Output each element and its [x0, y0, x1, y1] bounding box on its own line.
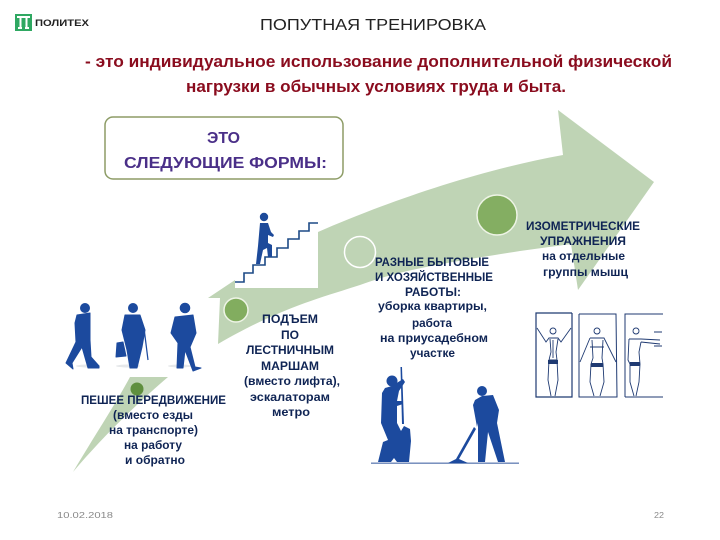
text: walking: на транспорте): [109, 425, 198, 437]
circle: stairs step: [224, 298, 248, 322]
title: ПОПУТНАЯ ТРЕНИРОВКА: [260, 17, 487, 34]
text: stairs: [244, 314, 340, 419]
icon: isometric exercise figures: [536, 313, 663, 397]
text: isometric exercises: УПРАЖНЕНИЯ: [540, 236, 626, 248]
icon: people cleaning: [371, 367, 519, 464]
circle: isometric step: [477, 195, 517, 235]
text: household work: [375, 257, 493, 360]
text: stairs: (вместо лифта),: [244, 376, 340, 388]
text: stairs: эскалаторам: [250, 392, 330, 404]
definition text: - это индивидуальное использование дополнительной физической: [85, 52, 672, 71]
text: household work: на приусадебном: [380, 333, 488, 345]
text: walking: на работу: [124, 440, 183, 452]
text: household work: уборка квартиры,: [378, 301, 487, 313]
growth arrow: [73, 110, 654, 472]
text: walking: (вместо езды: [113, 410, 193, 422]
text: walking: ПЕШЕЕ ПЕРЕДВИЖЕНИЕ: [81, 395, 226, 407]
box: these forms: СЛЕДУЮЩИЕ ФОРМЫ:: [124, 155, 327, 172]
logo: ПОЛИТЕХ: [35, 18, 89, 28]
text: household work: И ХОЗЯЙСТВЕННЫЕ: [375, 271, 493, 284]
date: 10.02.2018: [57, 510, 113, 520]
text: household work: работа: [412, 318, 453, 330]
circle: walking step: [130, 382, 144, 396]
text: household work: РАБОТЫ:: [405, 287, 461, 299]
page number: 22: [654, 510, 664, 520]
text: isometric exercises: [526, 221, 640, 279]
circle: household step: [344, 236, 376, 268]
text: stairs: ПОДЪЕМ: [262, 314, 318, 326]
logo: [15, 14, 89, 31]
box: these forms: [105, 117, 343, 179]
definition text: нагрузки в обычных условиях труда и быта.: [186, 77, 566, 96]
text: stairs: МАРШАМ: [261, 361, 319, 373]
text: isometric exercises: на отдельные: [542, 251, 625, 263]
text: stairs: ЛЕСТНИЧНЫМ: [246, 345, 334, 357]
text: stairs: ПО: [281, 330, 299, 342]
text: stairs: метро: [272, 407, 310, 419]
text: walking: [81, 395, 226, 467]
icon: person climbing stairs: [235, 213, 318, 282]
icon: three walking people: [66, 303, 201, 371]
text: walking: и обратно: [125, 455, 185, 467]
text: household work: РАЗНЫЕ БЫТОВЫЕ: [375, 257, 489, 269]
text: isometric exercises: ИЗОМЕТРИЧЕСКИЕ: [526, 221, 640, 233]
text: isometric exercises: группы мышц: [543, 267, 628, 279]
definition text: [85, 52, 672, 96]
box: these forms: ЭТО: [207, 130, 240, 147]
text: household work: участке: [410, 348, 455, 360]
